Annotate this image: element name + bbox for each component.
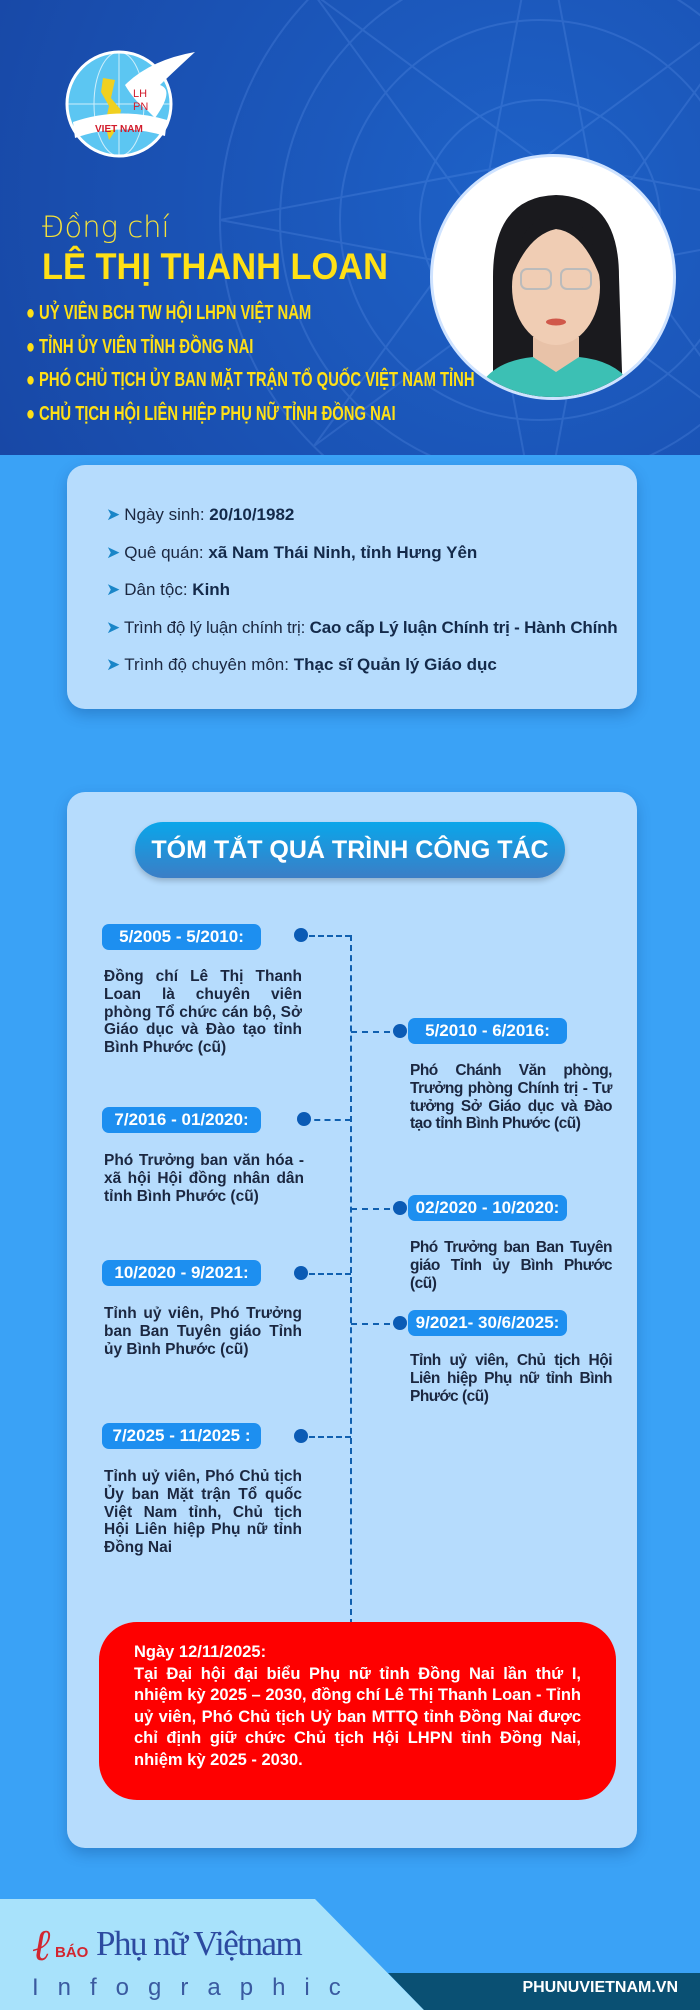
footer: Infographic: Infographic: [32, 1974, 360, 2001]
callout: 12/11/2025: [99, 1622, 616, 1800]
footer: light panel: [0, 1899, 700, 2010]
position bullets: [26, 300, 475, 424]
timeline item 1: [102, 924, 308, 1056]
timeline item 4: [393, 1195, 612, 1292]
timeline item 3: [102, 1107, 311, 1205]
timeline item 5: Tỉnh uỷ viên, Phó Trưởng ban Ban Tuyên giáo Tỉnh ủy Bình Phước (cũ): [104, 1305, 302, 1358]
timeline item 7: Tỉnh uỷ viên, Phó Chủ tịch Ủy ban Mặt trận Tổ quốc Việt Nam tỉnh, Chủ tịch Hội Liên hiệp Phụ nữ tỉnh Đồng Nai: [104, 1468, 302, 1556]
logo LHPN: VIET NAM: [95, 124, 143, 135]
timeline item 6: [393, 1310, 612, 1405]
logo LHPN: PN: [133, 101, 148, 113]
timeline item 4: 02/2020 - 10/2020:: [416, 1198, 559, 1217]
callout: 12/11/2025: Ngày 12/11/2025:: [134, 1643, 266, 1661]
timeline item 7: 7/2025 - 11/2025 :: [112, 1426, 250, 1445]
info row: birth: ➤Ngày sinh: 20/10/1982: [106, 505, 294, 524]
heading: name: LÊ THỊ THANH LOAN: [42, 246, 388, 287]
footer: website: PHUNUVIETNAM.VN: [522, 1979, 678, 1996]
position bullets: ● CHỦ TỊCH HỘI LIÊN HIỆP PHỤ NỮ TỈNH ĐỒNG NAI: [26, 402, 396, 424]
timeline item 7: [102, 1423, 308, 1556]
timeline item 4: Phó Trưởng ban Ban Tuyên giáo Tỉnh ủy Bình Phước (cũ): [410, 1239, 612, 1292]
timeline item 3: 7/2016 - 01/2020:: [114, 1110, 249, 1129]
timeline item 6: 9/2021- 30/6/2025:: [416, 1313, 559, 1332]
footer logo: ℓ: [32, 1921, 50, 1970]
panel: personal info: [67, 465, 637, 709]
timeline item 5: 10/2020 - 9/2021:: [114, 1263, 249, 1282]
heading: Đồng chí: Đồng chí: [42, 210, 170, 244]
timeline item 2: [393, 1018, 612, 1132]
info row: political: ➤Trình độ lý luận chính trị: Cao cấp Lý luận Chính trị - Hành Chính: [106, 618, 618, 637]
info row: hometown: ➤Quê quán: xã Nam Thái Ninh, tỉnh Hưng Yên: [106, 543, 477, 562]
logo LHPN: [66, 50, 195, 158]
footer logo: Phụ nữ Việtnam: [96, 1924, 301, 1963]
footer logo: [32, 1921, 302, 1970]
timeline item 1: 5/2005 - 5/2010:: [119, 927, 244, 946]
position bullets: ● PHÓ CHỦ TỊCH ỦY BAN MẶT TRẬN TỔ QUỐC VIỆT NAM TỈNH: [26, 369, 475, 391]
timeline item 2: 5/2010 - 6/2016:: [425, 1021, 550, 1040]
position bullets: ● TỈNH ỦY VIÊN TỈNH ĐỒNG NAI: [26, 336, 253, 358]
callout: 12/11/2025: Tại Đại hội đại biểu Phụ nữ tỉnh Đồng Nai lần thứ I, nhiệm kỳ 2025 – 2030, đồng chí Lê Thị Thanh Loan - Tỉnh uỷ viên, Phó Chủ tịch Uỷ ban MTTQ tỉnh Đồng Nai được chỉ định giữ chức Chủ tịch Hội LHPN tỉnh Đồng Nai, nhiệm kỳ 2025 - 2030.: [134, 1664, 581, 1768]
timeline item 2: Phó Chánh Văn phòng, Trưởng phòng Chính trị - Tư tưởng Sở Giáo dục và Đào tạo tỉnh Bình Phước (cũ): [410, 1062, 612, 1132]
timeline vertical line: [350, 935, 352, 1625]
portrait photo: [430, 154, 676, 400]
info row: expertise: ➤Trình độ chuyên môn: Thạc sĩ Quản lý Giáo dục: [106, 655, 497, 674]
timeline item 3: Phó Trưởng ban văn hóa - xã hội Hội đồng nhân dân tỉnh Bình Phước (cũ): [104, 1152, 304, 1205]
timeline title: TÓM TẮT QUÁ TRÌNH CÔNG TÁC: [151, 836, 549, 864]
position bullets: ● UỶ VIÊN BCH TW HỘI LHPN VIỆT NAM: [26, 302, 311, 324]
header background: [0, 0, 700, 455]
logo LHPN: LH: [133, 88, 147, 100]
panel: timeline: [67, 792, 637, 1848]
timeline item 6: Tỉnh uỷ viên, Chủ tịch Hội Liên hiệp Phụ nữ tỉnh Bình Phước (cũ): [410, 1352, 612, 1405]
info row: ethnicity: ➤Dân tộc: Kinh: [106, 580, 230, 599]
timeline item 5: [102, 1260, 308, 1358]
footer logo: BÁO: [55, 1944, 88, 1961]
timeline item 1: Đồng chí Lê Thị Thanh Loan là chuyên viên phòng Tổ chức cán bộ, Sở Giáo dục và Đào tạo tỉnh Bình Phước (cũ): [104, 968, 302, 1056]
timeline title: [135, 822, 565, 878]
